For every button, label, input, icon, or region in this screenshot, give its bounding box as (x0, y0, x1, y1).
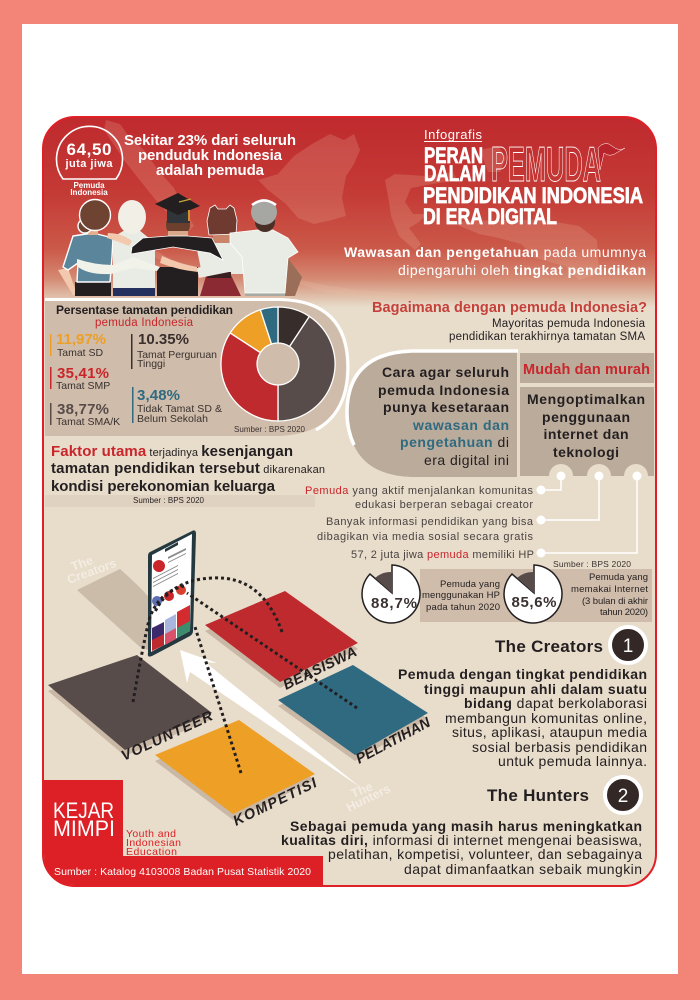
arrow: the hunters: Hunters (344, 781, 393, 815)
stat: Tamat SMP: 35,41% (57, 365, 109, 382)
stat: Perguruan Tinggi (131, 331, 217, 370)
caption: phone users: Pemuda yang (440, 579, 500, 590)
arms (77, 233, 242, 278)
platform: pelatihan: PELATIHAN (353, 715, 434, 768)
panel: optimise internet: Mengoptimalkan (527, 391, 645, 407)
panel: how to achieve equality: pengetahuan di (400, 434, 509, 450)
section: the creators (398, 627, 647, 769)
section: the creators: untuk pemuda lainnya. (498, 753, 647, 769)
stat: Tamat SMA/K: Tamat SMA/K (56, 416, 120, 428)
platform: beasiswa (205, 591, 360, 694)
panel: education statistics (45, 300, 348, 436)
population badge: juta jiwa (64, 158, 113, 170)
section: the hunters: Sebagai pemuda yang masih harus meningkatkan (290, 818, 642, 834)
title: PEMUDA (491, 138, 601, 192)
logo block: Education (126, 846, 177, 858)
section: the hunters: dapat dimanfaatkan sebaik mungkin (404, 861, 642, 877)
internet facts: Pemuda yang aktif menjalankan komunitas (305, 485, 534, 497)
population badge (56, 126, 123, 197)
title: Infografis (424, 127, 482, 142)
stat: Tamat SMA/K: 38,77% (57, 401, 109, 418)
population badge: 64,50 (66, 140, 112, 159)
intro statement: Wawasan dan pengetahuan pada umumnya (344, 244, 646, 260)
title: DALAM (424, 161, 486, 186)
statistics heading: Persentase tamatan pendidikan (56, 303, 233, 317)
caption: phone users: menggunakan HP (422, 590, 500, 601)
logo block: KEJAR (53, 798, 114, 823)
stat: Tidak tamat SD (132, 387, 222, 425)
title: PENDIDIKAN INDONESIA (423, 183, 643, 208)
number badge 2 (605, 777, 641, 813)
section: the creators: bidang dapat berkolaborasi (464, 695, 647, 711)
panel: how to achieve equality: wawasan dan (412, 417, 509, 433)
person 3 graduate (131, 193, 223, 296)
stat: Perguruan Tinggi: Tinggi (137, 358, 165, 370)
section: the creators: Pemuda dengan tingkat pendidikan (398, 666, 647, 682)
source note: Sumber : BPS 2020 (553, 559, 631, 569)
indonesia map silhouette (104, 120, 599, 283)
question block: Mayoritas pemuda Indonesia (492, 318, 646, 330)
panel: optimise internet: internet dan (544, 426, 628, 442)
internet facts: Banyak informasi pendidikan yang bisa (326, 516, 534, 528)
main factor text: Faktor utama terjadinya kesenjangan (51, 443, 293, 460)
panel: easy and cheap (520, 353, 654, 383)
section: the creators: The Creators (495, 637, 603, 656)
platform: volunteer: VOLUNTEER (119, 708, 216, 765)
number badge 1 (610, 627, 646, 663)
platform: the creators: The (69, 553, 95, 574)
arrow: the hunters (180, 650, 393, 815)
person 1 (58, 200, 113, 296)
panel: optimise internet (520, 387, 654, 476)
question block: pendidikan terakhirnya tamatan SMA (449, 331, 645, 343)
platform: kompetisi (155, 720, 320, 830)
people illustration (58, 193, 302, 296)
logo block: MIMPI (53, 816, 115, 841)
logo block: Indonesian (126, 837, 181, 849)
number badge 1: 1 (623, 636, 633, 657)
heading: population share: Sekitar 23% dari seluruh (124, 132, 296, 149)
panel: how to achieve equality (347, 351, 518, 477)
main factor text: tamatan pendidikan tersebut dikarenakan (51, 460, 325, 477)
source note: Sumber : BPS 2020 (234, 425, 306, 434)
intro statement (344, 244, 646, 278)
heading: population share: adalah pemuda (156, 162, 265, 179)
pie: internet users (504, 565, 562, 623)
main factor text: kondisi perekonomian keluarga (51, 478, 276, 495)
panel: how to achieve equality: era digital ini (424, 452, 509, 468)
arrow: the hunters: The (349, 779, 375, 801)
main factor text: Sumber : BPS 2020 (133, 496, 205, 505)
statistics heading: pemuda Indonesia (95, 317, 194, 329)
stat: Perguruan Tinggi: Tamat Perguruan (137, 349, 217, 361)
band: phone and internet use (362, 565, 652, 623)
caption: internet users: (3 bulan di akhir (582, 596, 648, 607)
caption: internet users: tahun 2020) (600, 607, 648, 618)
stat: Tidak tamat SD: Belum Sekolah (137, 413, 208, 425)
caption: internet users (571, 572, 648, 618)
stat: Tidak tamat SD: Tidak Tamat SD & (137, 403, 222, 415)
section: the creators: tinggi maupun ahli dalam suatu (424, 681, 647, 697)
question block: Bagaimana dengan pemuda Indonesia? (372, 300, 647, 316)
pie: phone users (362, 565, 420, 623)
section: the hunters: pelatihan, kompetisi, volunteer, dan sebagainya (328, 846, 642, 862)
main factor text (45, 443, 325, 507)
stat: Tamat SD (50, 331, 106, 359)
connector lines and dots (536, 464, 648, 558)
platform: the creators (65, 553, 150, 650)
caption: phone users (422, 579, 500, 613)
person 5 (230, 199, 302, 296)
heading: population share: penduduk Indonesia (138, 147, 283, 164)
internet facts: 57, 2 juta jiwa pemuda memiliki HP (351, 549, 534, 561)
pie: internet users: 85,6% (512, 594, 556, 611)
stat: Tidak tamat SD: 3,48% (137, 387, 180, 404)
panel: easy and cheap: Mudah dan murah (523, 362, 650, 378)
section: the hunters: The Hunters (487, 786, 589, 805)
population badge: Indonesia (70, 188, 108, 197)
stat: Perguruan Tinggi: 10.35% (138, 331, 189, 348)
population badge: Pemuda (73, 181, 105, 190)
stat: Tamat SMA/K (50, 401, 120, 428)
person 4 (195, 205, 245, 296)
logo block: Sumber : Katalog 4103008 Badan Pusat Statistik 2020 (54, 866, 311, 878)
platform: volunteer (48, 655, 216, 765)
title: PERAN (424, 143, 483, 168)
question block (372, 300, 647, 343)
section: the hunters (281, 777, 642, 877)
section: the creators: situs, aplikasi, ataupun media (452, 724, 647, 740)
section: the creators: membangun komunitas online, (445, 710, 647, 726)
platform: kompetisi: KOMPETISI (231, 775, 320, 830)
logo block: Youth and (126, 828, 176, 840)
donut chart (221, 307, 335, 421)
dotted connectors (133, 578, 357, 773)
panel: how to achieve equality: punya kesetaraan (383, 399, 509, 415)
title (423, 127, 643, 229)
logo block (44, 780, 323, 885)
phone (148, 530, 196, 657)
panel: optimise internet: penggunaan (542, 409, 630, 425)
caption: internet users: Pemuda yang (589, 572, 648, 583)
statistics heading (56, 303, 233, 329)
caption: phone users: pada tahun 2020 (426, 602, 500, 613)
panel: how to achieve equality: pemuda Indonesia (378, 382, 509, 398)
heading: population share (124, 132, 296, 179)
stat: Tamat SMP: Tamat SMP (56, 380, 110, 392)
section: the hunters: kualitas diri, informasi di internet mengenai beasiswa, (281, 832, 642, 848)
intro statement: dipengaruhi oleh tingkat pendidikan (398, 262, 646, 278)
internet facts (305, 485, 534, 561)
internet facts: edukasi berperan sebagai creator (355, 499, 533, 511)
platform: beasiswa: BEASISWA (281, 644, 360, 694)
title: DI ERA DIGITAL (423, 204, 557, 229)
panel: how to achieve equality: Cara agar seluruh (382, 364, 509, 380)
person 2 (113, 200, 155, 296)
stat: Tamat SD: Tamat SD (57, 347, 104, 359)
main panel (43, 117, 656, 886)
pie: phone users: 88,7% (371, 595, 417, 612)
caption: internet users: memakai Internet (571, 584, 648, 595)
platform: the creators: Creators (65, 556, 118, 587)
number badge 2: 2 (618, 786, 628, 807)
stat: Tamat SMP (50, 365, 110, 392)
internet facts: dibagikan via media sosial secara gratis (317, 531, 534, 543)
panel: optimise internet: teknologi (553, 444, 619, 460)
section: the creators: sosial berbasis pendidikan (472, 739, 647, 755)
platform: pelatihan (278, 665, 434, 768)
stat: Tamat SD: 11,97% (56, 331, 106, 348)
